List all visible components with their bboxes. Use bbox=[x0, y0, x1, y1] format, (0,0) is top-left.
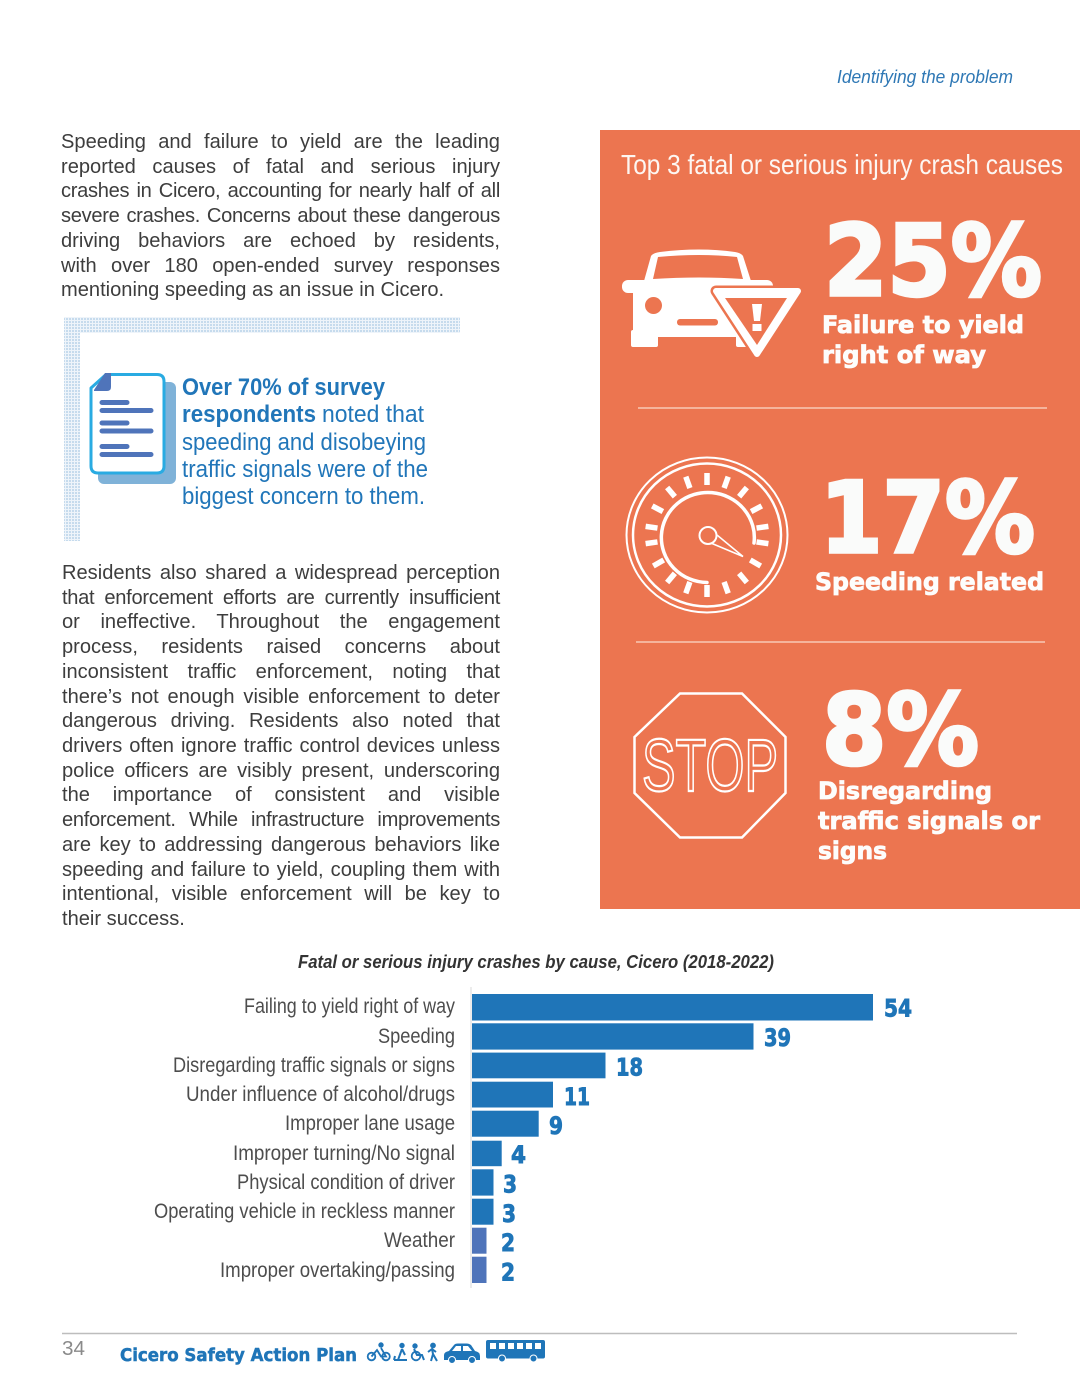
callout text: traffic signals were of the bbox=[182, 456, 428, 483]
text block: speeding and failure to yield: Speeding and failure to yield are the leading bbox=[61, 131, 500, 153]
text block: enforcement perception: speeding and failure to yield, coupling them with bbox=[62, 859, 500, 881]
callout text: noted that bbox=[322, 401, 424, 428]
callout text bbox=[182, 374, 428, 510]
stat: 25 percent: 25% bbox=[824, 205, 1042, 319]
stat: 8 percent: traffic signals or bbox=[818, 807, 1040, 835]
chart values: 4 bbox=[511, 1141, 526, 1169]
callout text: respondents bbox=[182, 401, 316, 428]
icon: car bbox=[444, 1344, 480, 1364]
text block: speeding and failure to yield: reported causes of fatal and serious injury bbox=[61, 156, 500, 178]
callout text: speeding and disobeying bbox=[182, 429, 426, 456]
chart labels: Speeding bbox=[378, 1025, 455, 1048]
stat: 8 percent bbox=[818, 674, 1040, 865]
text block: enforcement perception: are key to addressing dangerous behaviors like bbox=[62, 834, 500, 856]
text block: enforcement perception: that enforcement efforts are currently insufficient bbox=[62, 587, 500, 609]
text block: enforcement perception: dangerous driving. Residents also noted that bbox=[62, 710, 500, 732]
chart labels: Operating vehicle in reckless manner bbox=[154, 1200, 455, 1223]
stat: 17 percent: 17% bbox=[820, 462, 1035, 576]
chart bars bbox=[472, 994, 873, 1283]
chart labels: Under influence of alcohol/drugs bbox=[186, 1083, 455, 1106]
chart values bbox=[501, 994, 912, 1286]
stat: 25 percent bbox=[822, 205, 1042, 369]
chart values: 2 bbox=[501, 1229, 515, 1257]
icon: car with warning triangle bbox=[622, 250, 798, 354]
text block: speeding and failure to yield: crashes in Cicero, accounting for nearly half of all bbox=[61, 180, 500, 202]
callout text: biggest concern to them. bbox=[182, 483, 425, 510]
stat: 17 percent: Speeding related bbox=[815, 568, 1044, 596]
chart values: 9 bbox=[549, 1112, 563, 1140]
footer title: Cicero Safety Action Plan bbox=[120, 1345, 357, 1366]
chart values: 11 bbox=[564, 1083, 590, 1111]
bar chart: crashes by cause bbox=[154, 952, 912, 1288]
section header: Identifying the problem bbox=[837, 66, 1013, 87]
chart values: 3 bbox=[502, 1200, 516, 1228]
text block: enforcement perception: drivers often ignore traffic control devices unless bbox=[62, 735, 500, 757]
chart labels: Physical condition of driver bbox=[237, 1171, 455, 1194]
text block: enforcement perception: inconsistent traffic enforcement, noting that bbox=[62, 661, 500, 683]
text block: enforcement perception bbox=[62, 562, 500, 930]
chart title: Fatal or serious injury crashes by cause, Cicero (2018-2022) bbox=[298, 952, 774, 972]
icon: stop sign bbox=[634, 694, 786, 838]
footer bbox=[62, 1334, 1017, 1366]
callout text: Over 70% of survey bbox=[182, 374, 385, 401]
chart labels: Failing to yield right of way bbox=[244, 995, 455, 1018]
text block: enforcement perception: the importance of consistent and visible bbox=[62, 784, 500, 806]
panel: top 3 crash causes bbox=[600, 130, 1080, 909]
icons: bicycle, scooter, wheelchair, pedestrian bbox=[368, 1343, 437, 1361]
icon: bus bbox=[486, 1340, 545, 1362]
page number: 34 bbox=[62, 1338, 85, 1360]
stat: 8 percent: signs bbox=[818, 837, 887, 865]
text block: speeding and failure to yield: driving behaviors are echoed by residents, bbox=[61, 230, 500, 252]
chart labels: Improper turning/No signal bbox=[233, 1142, 455, 1165]
chart values: 2 bbox=[501, 1258, 515, 1286]
text block: speeding and failure to yield: mentioning speeding as an issue in Cicero. bbox=[61, 279, 444, 301]
chart labels: Improper lane usage bbox=[285, 1112, 455, 1135]
text block: enforcement perception: or ineffective. Throughout the engagement bbox=[62, 611, 500, 633]
chart labels bbox=[154, 995, 455, 1282]
icon: speedometer bbox=[626, 458, 788, 612]
callout: survey finding bbox=[64, 317, 460, 541]
text block: enforcement perception: their success. bbox=[62, 908, 185, 930]
text block: enforcement perception: process, residents raised concerns about bbox=[62, 636, 500, 658]
text block: enforcement perception: enforcement. While infrastructure improvements bbox=[62, 809, 500, 831]
text block: enforcement perception: there’s not enough visible enforcement to deter bbox=[62, 686, 500, 708]
stat: 25 percent: Failure to yield bbox=[822, 311, 1024, 339]
chart values: 3 bbox=[503, 1170, 517, 1198]
chart values: 39 bbox=[764, 1024, 791, 1052]
chart labels: Weather bbox=[384, 1229, 455, 1252]
chart values: 18 bbox=[616, 1054, 643, 1082]
stat: 8 percent: 8% bbox=[822, 674, 979, 788]
text block: speeding and failure to yield bbox=[61, 131, 500, 301]
chart labels: Improper overtaking/passing bbox=[220, 1259, 455, 1282]
stat: 25 percent: right of way bbox=[822, 341, 986, 369]
icon: document bbox=[91, 373, 176, 484]
text block: enforcement perception: police officers are visibly present, underscoring bbox=[62, 760, 500, 782]
chart labels: Disregarding traffic signals or signs bbox=[173, 1054, 455, 1077]
chart values: 54 bbox=[884, 994, 912, 1022]
text block: enforcement perception: intentional, visible enforcement will be key to bbox=[62, 883, 500, 905]
text block: speeding and failure to yield: severe crashes. Concerns about these dangerous bbox=[61, 205, 500, 227]
icon: stop sign: STOP bbox=[642, 724, 778, 807]
text block: enforcement perception: Residents also shared a widespread perception bbox=[62, 562, 500, 584]
stat: 8 percent: Disregarding bbox=[818, 777, 992, 805]
text block: speeding and failure to yield: with over 180 open-ended survey responses bbox=[61, 255, 500, 277]
